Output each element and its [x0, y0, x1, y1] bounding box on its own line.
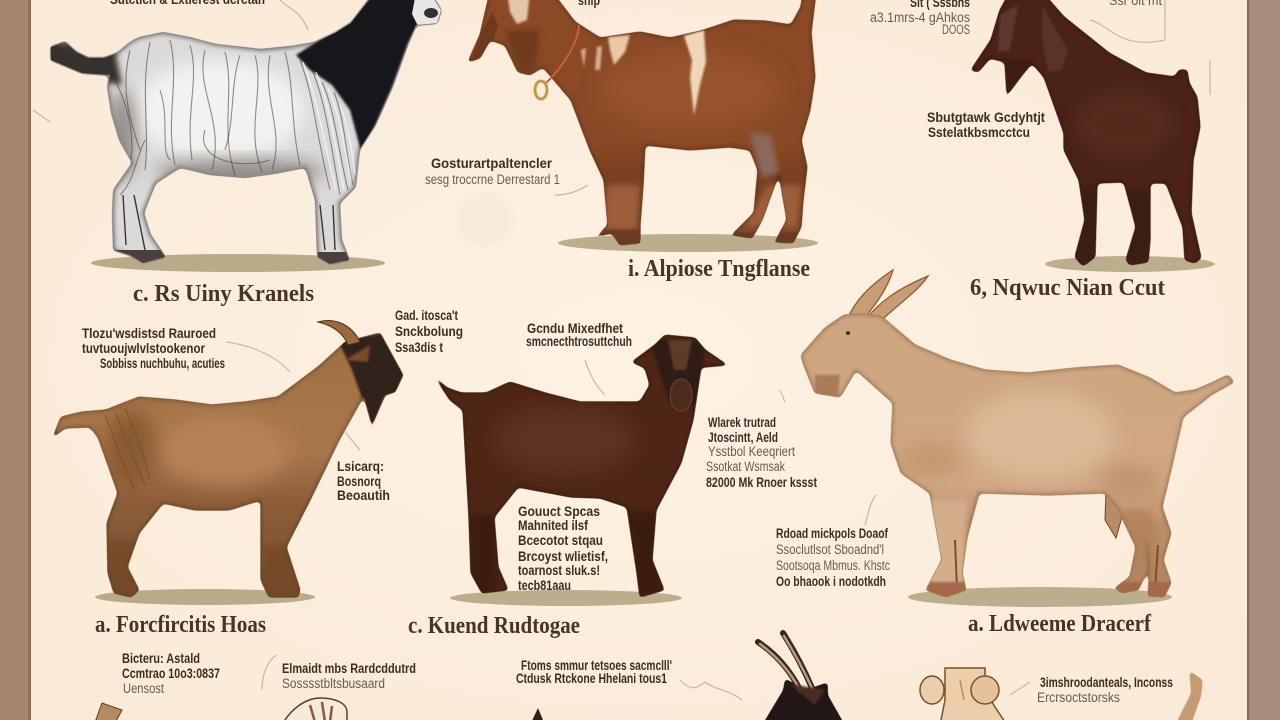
note: goat 4 upper left: Tlozu'wsdistsd Rauroed [82, 326, 216, 341]
note: goat 4 upper left: tuvtuoujwlvlstookenor [82, 341, 206, 356]
goat 3: dark brown floppy-eared goat [971, 0, 1215, 272]
goat 6: light tan goat with long horns [801, 270, 1234, 607]
note: goat 3: Sstelatkbsmcctcu [928, 125, 1030, 140]
note: goat 6: Rdoad mickpols Doaof [776, 526, 888, 541]
note: goat 5 right: Ysstbol Keeqriert [708, 444, 795, 459]
ground shadow [558, 234, 818, 252]
heading: breed 1: c. Rs Uiny Kranels [133, 281, 314, 307]
note: goat 4 chest: Beoautih [337, 488, 390, 503]
note: goat 5 belly: Bcecotot stqau [518, 533, 603, 548]
text block: top right group: DOOS [942, 22, 970, 37]
note: bottom left: Bicteru: Astald [122, 651, 200, 666]
note: goat 2: sesg troccrne Derrestard 1 [425, 172, 560, 187]
note: goat 4 head: Gad. itosca't [395, 308, 458, 323]
goat 2: brown goat with collar and white patches [468, 0, 818, 252]
note: goat 4 head: Ssa3dis t [395, 340, 443, 355]
note: goat 2: Gosturartpaltencler [431, 156, 553, 171]
note: bottom centre-left: Sosssstbltsbusaard [282, 676, 385, 691]
note: goat 5 belly: Brcoyst wlietisf, [518, 549, 608, 564]
note: goat 4 upper left: Sobbiss nuchbuhu, acuties [100, 356, 225, 371]
goat 1: white long-haired body with black neck [45, 0, 445, 272]
note: bottom centre-left [282, 661, 416, 691]
note: goat 3 [927, 110, 1045, 140]
note: bottom centre: Ctdusk Rtckone Hhelani tous1 [516, 671, 667, 686]
ground shadow [95, 589, 315, 605]
ground shadow [450, 590, 682, 606]
note: bottom left: Ccmtrao 10o3:0837 [122, 666, 220, 681]
horn [318, 321, 360, 345]
note: goat 4 chest [337, 459, 390, 503]
note: goat 5 right [706, 415, 817, 490]
note: goat 5 belly: Mahnited ilsf [518, 518, 588, 533]
goat 4: tan-brown goat with dark head and beard [53, 321, 410, 605]
note: goat 4 head [395, 308, 463, 355]
note: bottom centre: Ftoms smmur tetsoes sacmclll' [521, 658, 672, 673]
hanging detail between hind leg and belly [1105, 490, 1124, 538]
heading: breed 5: c. Kuend Rudtogae [408, 613, 580, 639]
note: goat 6: Sootsoqa Mbmus. Khstc [776, 558, 890, 573]
note: goat 5 right: Jtoscintt, Aeld [708, 430, 778, 445]
note: goat 4 upper left [82, 326, 225, 371]
note: bottom centre-left: Elmaidt mbs Rardcddutrd [282, 661, 416, 676]
note: bottom right: 3imshroodanteals, Inconss [1040, 675, 1173, 690]
text block: top right group: a3.1mrs-4 gAhkos [870, 10, 970, 25]
note: goat 6: Oo bhaook i nodotkdh [776, 574, 886, 589]
goat 8: partial tan goat, rear view (bottom) [920, 668, 1203, 720]
note: goat 3: Sbutgtawk Gcdyhtjt [927, 110, 1045, 125]
note: goat 6: Ssoclutlsot Sboadnd'l [776, 542, 884, 557]
ground shadow [91, 254, 385, 272]
note: bottom left: Uensost [123, 681, 164, 696]
note: goat 5 belly [518, 504, 608, 593]
goat 5: dark brown goat with drooping ears [435, 335, 727, 606]
note: goat 5 right: Wlarek trutrad [708, 415, 776, 430]
heading: breed 3: 6, Nqwuc Nian Ccut [970, 275, 1165, 301]
note: goat 5 belly: toarnost sluk.s! [518, 563, 600, 578]
note: bottom centre [516, 658, 672, 686]
note: goat 5 belly: Gouuct Spcas [518, 504, 600, 519]
note: goat 5 right: Ssotkat Wsmsak [706, 459, 785, 474]
note: bottom left [122, 651, 220, 696]
note: goat 5 top: Gcndu Mixedfhet [527, 321, 623, 336]
note: goat 5 right: 82000 Mk Rnoer kssst [706, 475, 817, 490]
collar and pendant [535, 25, 579, 99]
note: bottom right [1037, 675, 1173, 705]
note: goat 5 top: smcnecthtrosuttchuh [526, 334, 632, 349]
ground shadow [908, 587, 1172, 607]
heading: breed 4: a. Forcfircitis Hoas [95, 612, 266, 638]
goat 7: partial dark goat with horns (bottom) [758, 633, 845, 720]
note: goat 4 head: Snckbolung [395, 324, 463, 339]
note: goat 5 belly: tecb81aau [518, 578, 571, 593]
note: goat 2 [425, 156, 560, 187]
note: goat 5 top [526, 321, 632, 349]
partial animals (bottom left) [94, 698, 545, 720]
heading: breed 2: i. Alpiose Tngflanse [628, 256, 810, 282]
note: bottom right: Ercrsoctstorsks [1037, 690, 1120, 705]
note: goat 6 [776, 526, 890, 589]
horns [846, 270, 928, 328]
note: goat 4 chest: Lsicarq: [337, 459, 384, 474]
text block: top right group [870, 0, 1162, 37]
heading: breed 6: a. Ldweeme Dracerf [968, 611, 1152, 637]
ground shadow [1045, 256, 1215, 272]
note: goat 4 chest: Bosnorq [337, 474, 381, 489]
